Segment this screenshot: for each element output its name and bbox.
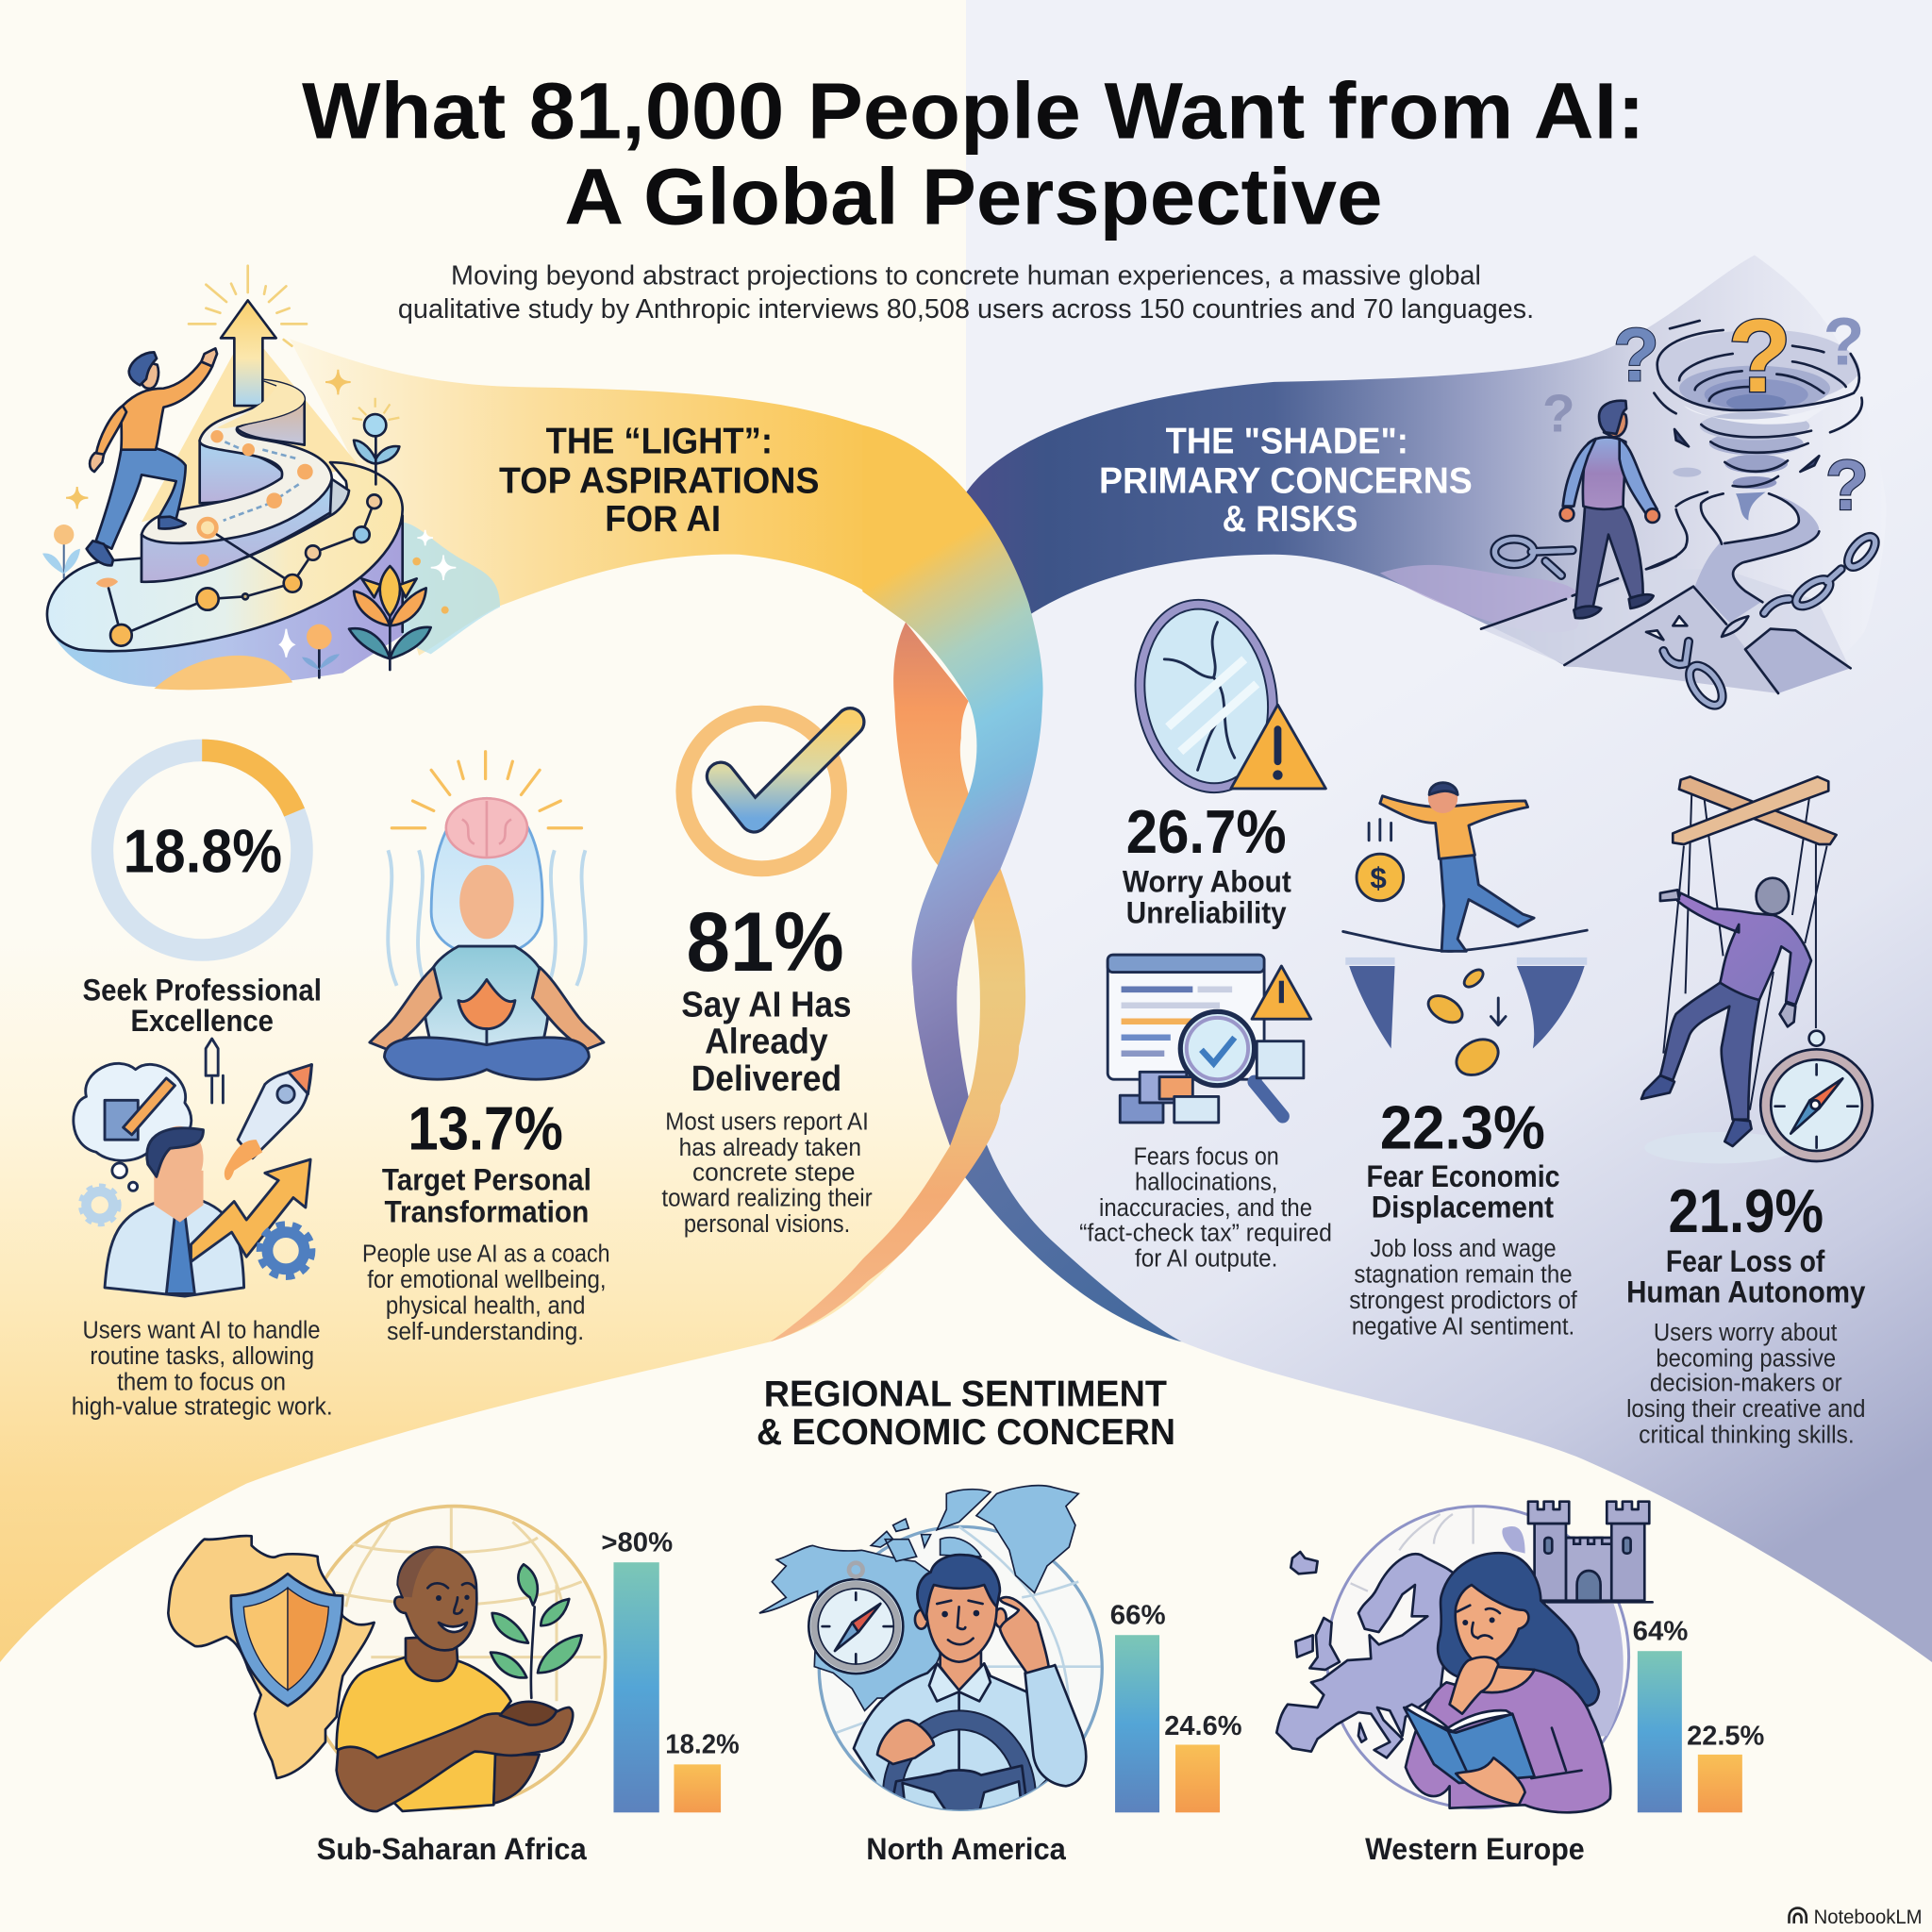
bar chart: 66% <box>1110 1600 1166 1630</box>
description: inaccuracies, and the <box>1099 1195 1312 1222</box>
heading: the shade: PRIMARY CONCERNS <box>1099 460 1473 501</box>
description: Users worry about <box>1654 1320 1837 1346</box>
panel: sub-saharan africa <box>168 1507 740 1866</box>
question marks: ? <box>1824 305 1864 380</box>
description: strongest prodictors of <box>1349 1288 1578 1314</box>
notebooklm logo: NotebookLM <box>1814 1907 1923 1928</box>
description: personal visions. <box>684 1211 850 1238</box>
description <box>1079 1143 1332 1273</box>
description: high-value strategic work. <box>72 1393 333 1420</box>
bar chart <box>1633 1616 1764 1812</box>
question marks: ? <box>1613 312 1659 396</box>
heading: regional sentiment: REGIONAL SENTIMENT <box>764 1374 1167 1414</box>
walking person <box>1560 401 1659 618</box>
description: negative AI sentiment. <box>1352 1314 1574 1341</box>
central twisted ribbon <box>770 425 1182 1341</box>
description: routine tasks, allowing <box>90 1343 314 1370</box>
title: A Global Perspective <box>564 152 1382 242</box>
tornado <box>1654 321 1862 521</box>
subtitle <box>398 261 1534 325</box>
label <box>1626 1243 1865 1309</box>
stat: 22.3% fear economic displacement <box>1343 783 1587 1341</box>
heading: the shade <box>1099 422 1473 540</box>
stat: 81% say AI has already delivered: 81% <box>687 895 844 989</box>
description: for emotional wellbeing, <box>367 1267 607 1293</box>
description <box>1626 1320 1865 1448</box>
description: for AI outpute. <box>1135 1246 1277 1273</box>
description: has already taken <box>679 1135 861 1161</box>
stat: 13.7% target personal transformation <box>362 752 610 1345</box>
label <box>1123 864 1291 929</box>
panel: the light banner <box>290 339 918 656</box>
flowers and sparkles <box>42 370 456 677</box>
question marks: ? <box>1825 445 1869 525</box>
description: Fears focus on <box>1134 1143 1279 1170</box>
donut chart <box>102 750 302 950</box>
description: physical health, and <box>386 1292 585 1319</box>
label <box>382 1162 591 1229</box>
heading: the shade: & RISKS <box>1223 499 1357 540</box>
stat: 81% say AI has already delivered <box>661 713 873 1238</box>
donut chart: 18.8% <box>124 817 282 886</box>
label <box>681 986 852 1099</box>
panel: north america <box>759 1486 1242 1866</box>
label: Excellence <box>130 1003 274 1038</box>
label: Unreliability <box>1126 894 1287 929</box>
description <box>362 1241 610 1345</box>
description: them to focus on <box>117 1369 286 1395</box>
bar chart: 18.2% <box>665 1730 740 1760</box>
icon: tightrope walker over gap with coins: $ <box>1370 862 1387 895</box>
broken chains <box>1494 532 1880 711</box>
bar chart: 24.6% <box>1164 1711 1242 1741</box>
description: self-understanding. <box>387 1319 584 1345</box>
icon: check mark in ring <box>684 713 850 869</box>
description <box>72 1317 333 1420</box>
illustration: person climbing spiral path <box>42 266 500 690</box>
label: Human Autonomy <box>1626 1274 1865 1309</box>
stat: 21.9% fear loss of human autonomy: 21.9% <box>1668 1176 1824 1245</box>
panel: sub-saharan africa: Sub-Saharan Africa <box>317 1831 588 1866</box>
panel: the shade banner <box>966 255 1887 686</box>
illustration: person facing tornado with broken chains <box>1481 298 1880 711</box>
question marks <box>1542 298 1869 525</box>
heading: the shade: THE "SHADE": <box>1166 422 1408 462</box>
label: Worry About <box>1123 864 1291 899</box>
heading: the light <box>499 422 820 540</box>
label: Target Personal <box>382 1162 591 1197</box>
stat: 22.3% fear economic displacement: 22.3% <box>1380 1092 1545 1161</box>
label: Say AI Has <box>681 986 852 1025</box>
bar chart <box>601 1527 740 1812</box>
description: decision-makers or <box>1650 1371 1842 1397</box>
bar chart: >80% <box>601 1527 673 1557</box>
stat: 13.7% target personal transformation: 13.7% <box>408 1094 563 1163</box>
title <box>302 65 1645 242</box>
heading: the light: FOR AI <box>605 499 721 540</box>
icon: tightrope walker over gap with coins <box>1343 783 1587 1082</box>
castle <box>1522 1502 1653 1602</box>
panel: north america: North America <box>866 1831 1067 1866</box>
description: toward realizing their <box>661 1186 873 1212</box>
illustration: europe map, castle and woman reading <box>1276 1502 1653 1812</box>
description: Most users report AI <box>665 1109 869 1136</box>
label: Fear Loss of <box>1666 1243 1824 1278</box>
stat: 18.8% seek professional excellence <box>72 750 333 1420</box>
description: losing their creative and <box>1626 1396 1865 1423</box>
heading: the light: THE “LIGHT”: <box>546 422 773 462</box>
label <box>83 973 322 1038</box>
question marks: ? <box>1728 298 1791 414</box>
icon: meditating person with brain <box>370 752 604 1079</box>
description: Job loss and wage <box>1370 1236 1557 1262</box>
panel: aspirations stats <box>72 713 873 1420</box>
label: Displacement <box>1372 1189 1554 1224</box>
icon: document with magnifier and warning <box>1108 955 1311 1123</box>
description: concrete stepe <box>692 1159 855 1186</box>
description: Users want AI to handle <box>83 1317 321 1343</box>
description: stagnation remain the <box>1354 1262 1573 1289</box>
bar chart: 64% <box>1633 1616 1688 1646</box>
label: Fear Economic <box>1366 1158 1560 1193</box>
heading: the light: TOP ASPIRATIONS <box>499 460 820 501</box>
bar chart: 22.5% <box>1687 1721 1764 1751</box>
description <box>661 1109 873 1238</box>
panel: western europe: Western Europe <box>1365 1831 1585 1866</box>
description: becoming passive <box>1656 1345 1836 1372</box>
stat: 26.7% worry about unreliability <box>1079 593 1332 1273</box>
label: Delivered <box>691 1059 841 1099</box>
panel: concerns stats <box>1079 593 1873 1448</box>
icon: cracked mirror with warning <box>1126 593 1325 798</box>
heading: regional sentiment <box>757 1374 1175 1453</box>
description: critical thinking skills. <box>1639 1422 1855 1448</box>
question marks: ? <box>1542 384 1575 443</box>
label: Transformation <box>385 1194 589 1229</box>
label <box>1366 1158 1560 1224</box>
label: Already <box>705 1023 828 1062</box>
title: What 81,000 People Want from AI: <box>302 65 1645 155</box>
panel: western europe <box>1276 1502 1764 1866</box>
person climbing <box>87 348 217 565</box>
label: Seek Professional <box>83 973 322 1008</box>
description: “fact-check tax” required <box>1079 1220 1332 1246</box>
bar chart <box>1110 1600 1242 1812</box>
stat: 21.9% fear loss of human autonomy <box>1626 776 1873 1448</box>
description: People use AI as a coach <box>362 1241 610 1267</box>
icon: puppet with strings and compass <box>1641 776 1873 1163</box>
description: hallocinations, <box>1135 1170 1277 1196</box>
description <box>1349 1236 1578 1341</box>
icon: professional with rocket and growth arrow <box>74 1039 311 1296</box>
illustration: north america map, compass and driver <box>759 1486 1102 1814</box>
stat: 26.7% worry about unreliability: 26.7% <box>1126 797 1287 866</box>
illustration: africa, shield and man with plant <box>168 1507 606 1811</box>
subtitle: qualitative study by Anthropic interviews 80,508 users across 150 countries and 70 languages. <box>398 294 1534 325</box>
subtitle: Moving beyond abstract projections to concrete human experiences, a massive global <box>451 261 1481 291</box>
heading: regional sentiment: & ECONOMIC CONCERN <box>757 1412 1175 1453</box>
